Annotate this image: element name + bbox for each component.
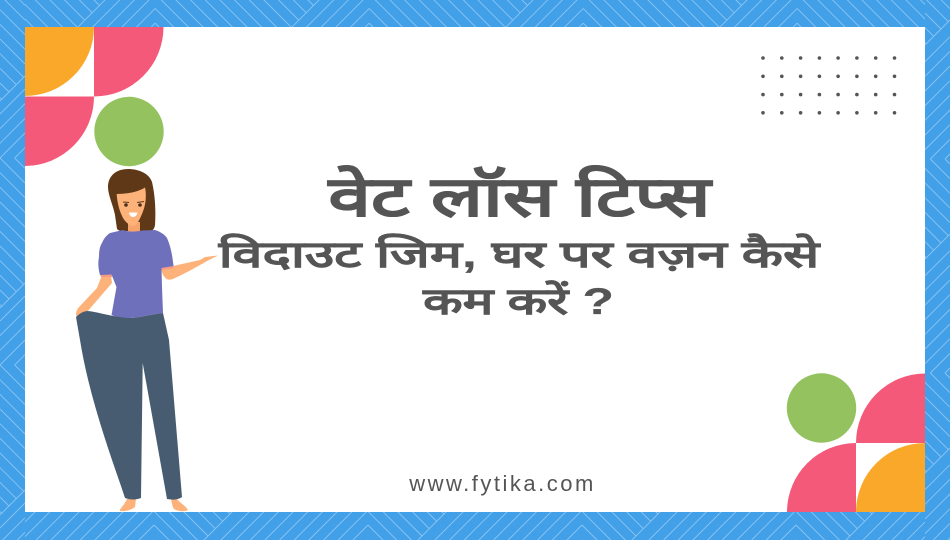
top-left geometric shapes <box>25 27 164 166</box>
website url: www.fytika.com <box>408 471 596 496</box>
subtitle line two: कम करें ? <box>422 280 614 322</box>
left arm <box>76 275 112 318</box>
right arm <box>161 256 218 280</box>
pink quarter circle top <box>94 27 164 96</box>
pink quarter circle bottom <box>787 443 856 512</box>
purple shirt <box>98 230 174 318</box>
title: वेट लॉस टिप्स <box>326 164 714 228</box>
green circle <box>787 373 856 443</box>
feet <box>120 499 188 511</box>
face <box>117 188 146 226</box>
green circle <box>94 97 164 166</box>
hair <box>108 169 155 232</box>
dot grid <box>761 56 896 115</box>
pink quarter circle bottom <box>25 96 94 166</box>
sleeve trims <box>100 266 174 277</box>
orange quarter circle <box>856 443 925 512</box>
subtitle line one: विदाउट जिम, घर पर वज़न कैसे <box>218 233 821 275</box>
woman in oversized trousers illustration <box>76 169 218 511</box>
smile <box>129 212 138 217</box>
trousers <box>76 311 182 500</box>
pink quarter circle top <box>856 374 925 443</box>
eyes and brows <box>123 202 144 207</box>
orange quarter circle <box>25 27 94 96</box>
neck <box>128 222 140 232</box>
bottom-right geometric shapes <box>787 373 925 512</box>
